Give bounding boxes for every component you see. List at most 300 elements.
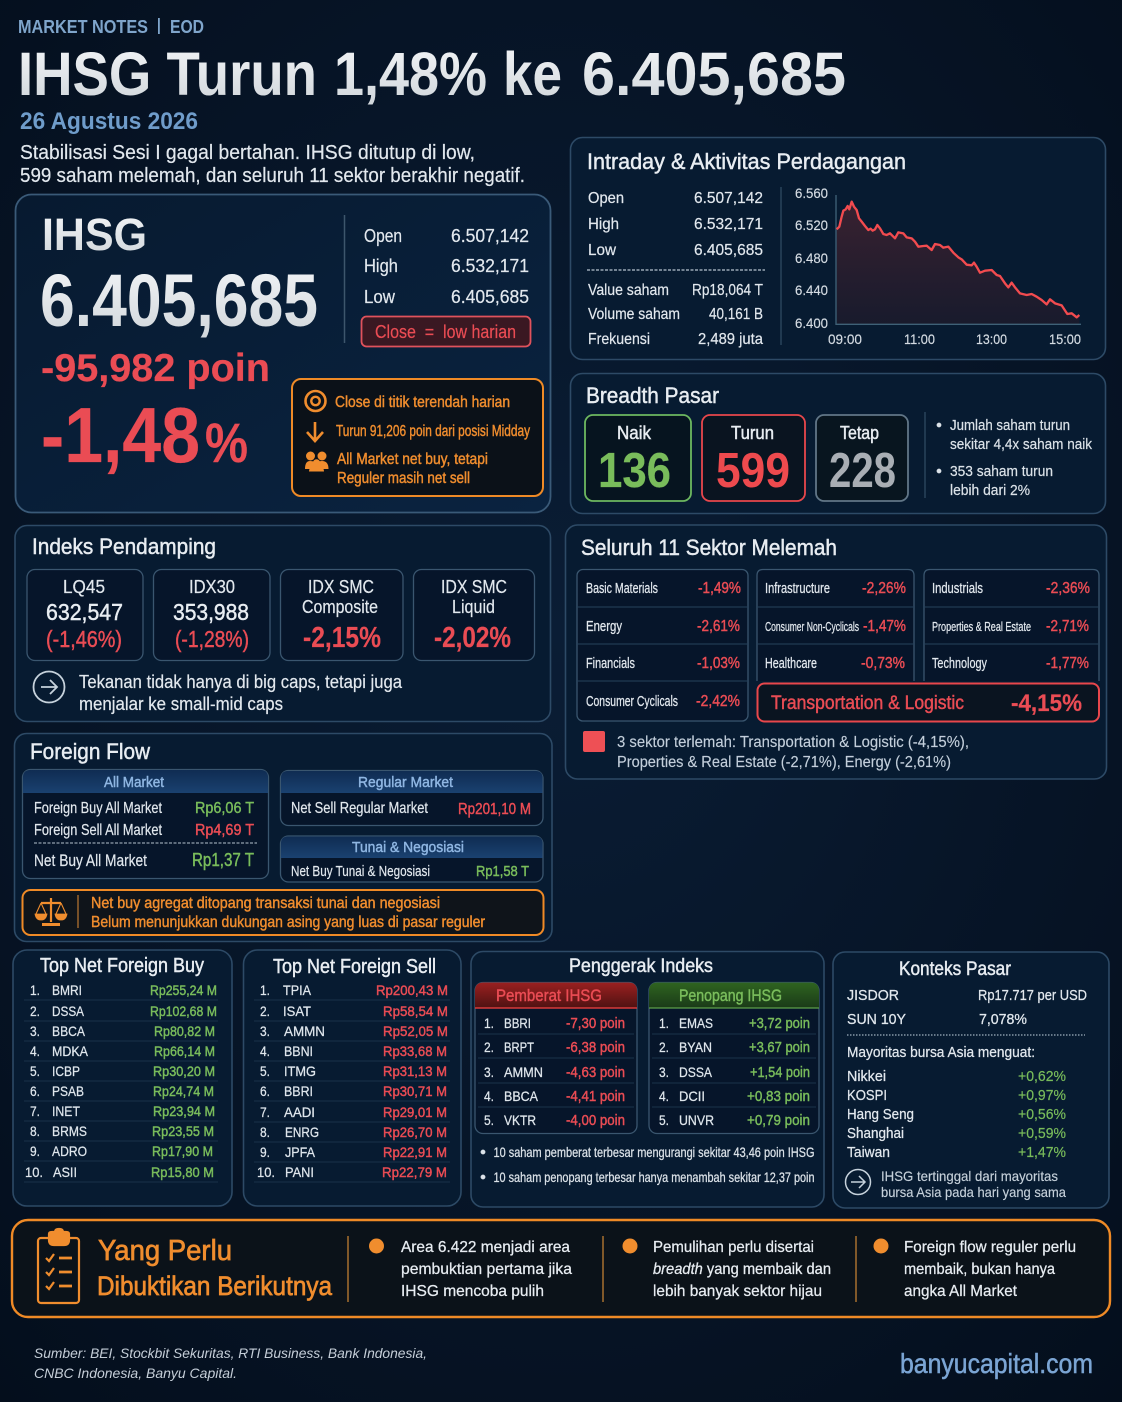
source note: CNBC Indonesia, Banyu Capital. — [34, 1365, 237, 1381]
list: buy rows: 3. — [30, 1023, 40, 1039]
stat: unchanged: 228 — [829, 444, 896, 498]
list: sell values: Rp33,68 M — [383, 1043, 447, 1059]
sector table column 3: Properties & Real Estate — [932, 619, 1031, 634]
subtitle: 599 saham melemah, dan seluruh 11 sektor berakhir negatif. — [20, 165, 525, 187]
item one — [369, 1238, 572, 1300]
table: laggards: -4,00 poin — [566, 1112, 625, 1129]
table: laggards: 2. — [484, 1039, 494, 1055]
list: buy values: Rp24,74 M — [153, 1083, 214, 1099]
callout: net buy note: Net buy agregat ditopang transaksi tunai dan negosiasi — [91, 895, 440, 912]
table: laggards: AMMN — [504, 1064, 543, 1080]
item three: membaik, bukan hanya — [904, 1261, 1055, 1278]
item two — [622, 1238, 831, 1300]
point change: -95,982 poin — [41, 347, 270, 390]
panel: market breadth — [570, 374, 1106, 514]
list: buy rows: 6. — [30, 1083, 40, 1099]
panel: companion indices — [15, 526, 550, 722]
activity list: Volume saham — [588, 306, 680, 323]
table: laggards: -6,38 poin — [566, 1039, 625, 1056]
panel: all eleven sectors down — [566, 525, 1106, 779]
sector table column 3: -2,36% — [1046, 580, 1090, 597]
table: laggards: BBCA — [504, 1088, 539, 1104]
item three: angka All Market — [904, 1283, 1018, 1300]
line chart: intraday: 6.400 — [795, 315, 828, 331]
table: supporters: 2. — [659, 1039, 669, 1055]
title: 6.405,685 — [582, 40, 846, 108]
sector table column 2: Healthcare — [765, 655, 817, 672]
table: laggards: 5. — [484, 1112, 494, 1128]
card: LQ45: LQ45 — [63, 577, 105, 597]
list: sell rows: TPIA — [283, 982, 312, 998]
table: supporters: DSSA — [679, 1064, 713, 1080]
list: sell rows: 9. — [260, 1144, 270, 1160]
list: sell rows: 5. — [260, 1063, 270, 1079]
list: buy rows: 4. — [30, 1043, 40, 1059]
list: buy rows: BBCA — [52, 1023, 86, 1039]
list: sell rows: BBNI — [284, 1043, 313, 1059]
Asia markets: +0,62% — [1018, 1068, 1066, 1085]
activity list: Value saham — [588, 282, 669, 299]
card: all market: Foreign Buy All Market — [34, 800, 162, 817]
OHLC list: Low — [588, 242, 616, 259]
card: all market: Rp6,06 T — [195, 800, 254, 817]
Asia markets: Hang Seng — [847, 1106, 914, 1123]
table: laggards: -7,30 poin — [566, 1015, 625, 1032]
list: sell values: Rp29,01 M — [383, 1104, 447, 1120]
item two: breadth yang membaik dan — [653, 1261, 831, 1278]
item two: Pemulihan perlu disertai — [653, 1239, 814, 1256]
callout: net buy note — [22, 890, 544, 935]
heading: Top Net Foreign Buy — [40, 955, 204, 977]
list: buy values: Rp17,90 M — [152, 1143, 213, 1159]
list: buy values: Rp23,55 M — [152, 1123, 214, 1139]
Asia markets: +0,59% — [1018, 1125, 1066, 1142]
list: buy rows: BRMS — [52, 1123, 87, 1139]
card: IDX30: (-1,28%) — [175, 626, 249, 652]
card: IDX SMC Liquid: IDX SMC — [441, 577, 507, 597]
breadth notes: lebih dari 2% — [950, 482, 1030, 499]
heading: Dibuktikan Berikutnya — [97, 1271, 333, 1301]
table: supporters: +3,67 poin — [749, 1039, 810, 1056]
table: supporters: 4. — [659, 1088, 669, 1104]
list: buy values: Rp102,68 M — [150, 1003, 217, 1019]
heading: Foreign Flow — [30, 739, 150, 764]
card: all market: Net Buy All Market — [34, 851, 147, 870]
callout: net buy note: Belum menunjukkan dukungan asing yang luas di pasar reguler — [91, 914, 486, 931]
line chart: intraday: 11:00 — [904, 331, 935, 347]
list: sell rows: 7. — [260, 1104, 270, 1120]
table: supporters: 1. — [659, 1015, 669, 1031]
list: sell rows: 8. — [260, 1124, 270, 1140]
list: sell values: Rp30,71 M — [383, 1083, 447, 1099]
callout: key notes — [292, 379, 543, 496]
source note — [34, 1345, 427, 1381]
card: IDX30: 353,988 — [173, 599, 249, 625]
card: all market: Rp1,37 T — [192, 850, 254, 870]
card: cash and negotiated — [280, 836, 543, 882]
card: IDX SMC Liquid: Liquid — [452, 597, 495, 617]
movers notes: 10 saham pemberat terbesar mengurangi sekitar 43,46 poin IHSG — [494, 1144, 814, 1160]
list: buy rows: MDKA — [52, 1043, 89, 1059]
close equals low badge: Close = low harian — [375, 322, 516, 342]
card: regular market: Rp201,10 M — [458, 801, 531, 818]
note — [881, 1168, 1066, 1200]
sector table column 2 — [757, 570, 914, 681]
card: all market: Rp4,69 T — [195, 822, 254, 839]
heading: Penggerak Indeks — [569, 956, 713, 977]
item one: pembuktian pertama jika — [401, 1261, 572, 1278]
list: buy rows: 5. — [30, 1063, 40, 1079]
table: supporters: 5. — [659, 1112, 669, 1128]
sector table column 3: -1,77% — [1046, 655, 1089, 672]
list: sell values: Rp31,13 M — [383, 1063, 447, 1079]
list: sell values: Rp58,54 M — [383, 1003, 448, 1019]
rates — [847, 987, 1087, 1028]
heading: Intraday & Aktivitas Perdagangan — [587, 149, 906, 174]
panel: IHSG hero — [16, 194, 550, 512]
list: sell rows: 2. — [260, 1003, 270, 1019]
stat: decliners — [702, 415, 805, 501]
breadth notes: sekitar 4,4x saham naik — [950, 436, 1092, 453]
panel: what needs proving next — [12, 1220, 1110, 1317]
activity list: 40,161 B — [709, 306, 763, 323]
header — [18, 17, 846, 187]
list: buy rows: 9. — [30, 1143, 40, 1159]
list: buy rows: 2. — [30, 1003, 40, 1019]
sector table column 1: Energy — [586, 618, 622, 635]
OHLC table: 6.507,142 — [451, 226, 529, 246]
list: buy rows: BMRI — [52, 982, 82, 998]
panel: index movers — [471, 952, 824, 1207]
panel: top net foreign sell — [244, 950, 461, 1206]
note: bursa Asia pada hari yang sama — [881, 1184, 1066, 1200]
list: buy values: Rp23,94 M — [153, 1103, 215, 1119]
card: all market: Foreign Sell All Market — [34, 822, 162, 839]
table: supporters: Penopang IHSG — [679, 986, 782, 1005]
stat: decliners: 599 — [716, 444, 790, 498]
card: LQ45: 632,547 — [46, 599, 123, 625]
website: banyucapital.com — [900, 1348, 1093, 1379]
sector table column 3: Technology — [932, 655, 987, 672]
card: cash and negotiated: Net Buy Tunai & Negosiasi — [291, 863, 430, 880]
panel: intraday and trading activity — [570, 138, 1106, 360]
sector table column 3: Industrials — [932, 580, 983, 597]
title: ke — [503, 40, 562, 108]
OHLC table: Open — [364, 226, 402, 246]
title — [18, 40, 846, 108]
heading — [97, 1235, 333, 1301]
Asia markets: +0,56% — [1018, 1106, 1066, 1123]
eyebrow: EOD — [170, 17, 204, 37]
list: sell rows: AMMN — [284, 1023, 325, 1039]
Asia markets: +1,47% — [1018, 1144, 1066, 1161]
card: cash and negotiated: Rp1,58 T — [476, 863, 529, 880]
callout: key notes: Reguler masih net sell — [337, 470, 470, 487]
highlighted sector: transportation: Transportation & Logistic — [771, 693, 964, 714]
line chart: intraday: 15:00 — [1049, 331, 1081, 347]
list: buy values: Rp80,82 M — [154, 1023, 215, 1039]
closing value: 6.405,685 — [40, 259, 318, 342]
heading: Top Net Foreign Sell — [273, 956, 436, 978]
date: 26 Agustus 2026 — [20, 108, 198, 135]
sector table column 2: -2,26% — [862, 580, 906, 597]
table: supporters: +1,54 poin — [750, 1064, 810, 1081]
OHLC table: Low — [364, 287, 396, 307]
weakest sector note: Properties & Real Estate (-2,71%), Energy (-2,61%) — [617, 754, 951, 771]
Asia markets — [847, 1044, 1066, 1161]
activity list: Frekuensi — [588, 331, 650, 348]
percent change: % — [205, 411, 248, 474]
table: supporters: DCII — [679, 1088, 705, 1104]
card: IDX SMC Composite — [280, 570, 403, 660]
panel: market context — [833, 952, 1109, 1208]
card: regular market: Net Sell Regular Market — [291, 800, 428, 817]
sector table column 2: Consumer Non-Cyclicals — [765, 619, 859, 634]
table: supporters: UNVR — [679, 1112, 714, 1128]
card: LQ45 — [27, 570, 143, 660]
card: IDX SMC Composite: -2,15% — [303, 622, 381, 654]
heading: Breadth Pasar — [586, 383, 719, 408]
table: laggards: -4,41 poin — [566, 1088, 625, 1105]
table: supporters: +3,72 poin — [749, 1015, 810, 1032]
list: sell rows: 1. — [260, 982, 270, 998]
card: regular market — [280, 770, 543, 826]
icon: people — [305, 452, 328, 472]
note — [79, 672, 403, 714]
eyebrow: MARKET NOTES — [18, 17, 148, 37]
table: laggards: BRPT — [504, 1039, 534, 1055]
list: sell rows: ENRG — [285, 1124, 319, 1140]
sector table column 1 — [577, 570, 748, 721]
Asia markets: Shanghai — [847, 1125, 904, 1142]
list: buy values: Rp66,14 M — [154, 1043, 215, 1059]
list: sell rows: 4. — [260, 1043, 270, 1059]
table: supporters: BYAN — [679, 1039, 712, 1055]
list: buy rows: PSAB — [52, 1083, 84, 1099]
list: buy rows: 1. — [30, 982, 40, 998]
list: sell values — [376, 982, 448, 1180]
table: laggards: 3. — [484, 1064, 494, 1080]
list: buy rows: ADRO — [52, 1143, 87, 1159]
list: sell rows: AADI — [284, 1104, 315, 1120]
source note: Sumber: BEI, Stockbit Sekuritas, RTI Business, Bank Indonesia, — [34, 1345, 427, 1361]
list: sell values: Rp200,43 M — [376, 982, 448, 998]
OHLC table: High — [364, 256, 398, 276]
highlighted sector: transportation: -4,15% — [1011, 690, 1082, 717]
icon: scales — [35, 898, 67, 924]
callout: key notes: Close di titik terendah harian — [335, 394, 510, 411]
list: buy values: Rp15,80 M — [151, 1164, 214, 1180]
sector table column 1: Consumer Cyclicals — [586, 693, 678, 710]
subtitle — [20, 142, 525, 187]
note: menjalar ke small-mid caps — [79, 694, 283, 714]
sector table column 1: Basic Materials — [586, 580, 658, 597]
table: supporters: +0,83 poin — [747, 1088, 810, 1105]
sector table column 3 — [924, 570, 1099, 681]
list: buy values: Rp255,24 M — [150, 982, 217, 998]
table: laggards: Pemberat IHSG — [496, 986, 602, 1005]
OHLC list: 6.405,685 — [694, 242, 763, 259]
sector table column 1: -1,49% — [698, 580, 741, 597]
weakest sector note: 3 sektor terlemah: Transportation & Logistic (-4,15%), — [617, 734, 969, 751]
card: IDX SMC Composite: Composite — [302, 597, 378, 617]
list: sell rows: 6. — [260, 1083, 270, 1099]
rates: Rp17.717 per USD — [978, 987, 1087, 1004]
line chart: intraday: 6.520 — [795, 217, 828, 233]
icon: circled arrow — [34, 672, 64, 702]
OHLC list: 6.532,171 — [694, 216, 763, 233]
sector table column 2: -1,47% — [863, 618, 906, 635]
card: all market — [22, 770, 268, 878]
OHLC list: High — [588, 216, 619, 233]
close equals low badge — [362, 316, 530, 346]
card: IDX30: IDX30 — [189, 577, 235, 597]
card: IDX SMC Composite: IDX SMC — [308, 577, 374, 597]
sector table column 2: Infrastructure — [765, 580, 830, 597]
title: IHSG Turun — [18, 40, 317, 108]
note: IHSG tertinggal dari mayoritas — [881, 1168, 1058, 1184]
item three — [874, 1238, 1076, 1300]
card: IDX30 — [154, 570, 270, 660]
list: buy rows: INET — [52, 1103, 80, 1119]
Asia markets: +0,97% — [1018, 1087, 1066, 1104]
table: supporters: +0,79 poin — [747, 1112, 810, 1129]
card: all market: All Market — [104, 774, 165, 791]
OHLC list: 6.507,142 — [694, 190, 763, 207]
movers notes: 10 saham penopang terbesar hanya menambah sekitar 12,37 poin — [494, 1169, 814, 1185]
table: laggards: BBRI — [504, 1015, 531, 1031]
sector table column 1: -2,61% — [697, 618, 740, 635]
table: laggards: 1. — [484, 1015, 494, 1031]
table: supporters: 3. — [659, 1064, 669, 1080]
list: buy rows: 7. — [30, 1103, 40, 1119]
list: sell rows: BBRI — [284, 1083, 313, 1099]
heading: Yang Perlu — [98, 1235, 232, 1267]
table: supporters — [649, 982, 819, 1134]
legend swatch — [583, 731, 605, 752]
card: LQ45: (-1,46%) — [46, 626, 122, 652]
rates: SUN 10Y — [847, 1011, 906, 1028]
sector table column 1: -2,42% — [696, 693, 740, 710]
list: sell rows: JPFA — [285, 1144, 316, 1160]
list: buy rows: 8. — [30, 1123, 40, 1139]
card: cash and negotiated: Tunai & Negosiasi — [352, 839, 464, 856]
line chart: intraday: 6.480 — [795, 250, 828, 266]
list: sell rows: ITMG — [284, 1063, 316, 1079]
card: regular market: Regular Market — [358, 774, 454, 791]
stat: advancers: 136 — [598, 444, 671, 498]
stat: unchanged: Tetap — [840, 423, 879, 443]
list: sell values: Rp22,91 M — [383, 1144, 447, 1160]
line chart: intraday: 6.440 — [795, 282, 828, 298]
breadth notes: Jumlah saham turun — [950, 417, 1070, 434]
list: buy rows: 10. — [25, 1164, 43, 1180]
weakest sector note — [617, 734, 969, 771]
callout: key notes: Turun 91,206 poin dari posisi Midday — [336, 423, 530, 440]
stat: advancers — [585, 415, 691, 501]
list: buy values: Rp30,20 M — [153, 1063, 215, 1079]
table: laggards: -4,63 poin — [566, 1064, 625, 1081]
percent change: -1,48 — [41, 391, 200, 479]
heading: Seluruh 11 Sektor Melemah — [581, 535, 837, 560]
icon: target — [306, 391, 326, 411]
title: 1,48% — [334, 40, 487, 108]
OHLC table: 6.405,685 — [451, 287, 529, 307]
icon: circled arrow — [846, 1170, 870, 1194]
list: sell rows: 10. — [257, 1164, 275, 1180]
list: sell rows — [257, 982, 325, 1180]
item three: Foreign flow reguler perlu — [904, 1239, 1076, 1256]
list: sell values: Rp26,70 M — [383, 1124, 447, 1140]
line chart: intraday: 09:00 — [828, 331, 862, 347]
table: supporters: EMAS — [679, 1015, 713, 1031]
sector table column 3: -2,71% — [1046, 618, 1089, 635]
list: sell rows: PANI — [285, 1164, 314, 1180]
Asia markets: Taiwan — [847, 1144, 890, 1161]
rates: 7,078% — [979, 1011, 1027, 1028]
activity list: Rp18,064 T — [692, 282, 763, 299]
list: sell values: Rp22,79 M — [382, 1164, 447, 1180]
OHLC list — [588, 190, 763, 259]
list: buy rows — [25, 982, 89, 1180]
table: laggards: 4. — [484, 1088, 494, 1104]
OHLC table: 6.532,171 — [451, 256, 529, 276]
card: IDX SMC Liquid: -2,02% — [434, 622, 511, 654]
breadth notes — [937, 417, 1092, 499]
heading: Indeks Pendamping — [32, 534, 216, 559]
highlighted sector: transportation — [758, 684, 1099, 722]
Asia markets: Nikkei — [847, 1068, 886, 1085]
table: laggards — [475, 982, 637, 1134]
activity list — [588, 282, 763, 348]
sector table column 1: Financials — [586, 655, 635, 672]
item one: IHSG mencoba pulih — [401, 1283, 544, 1300]
stat: advancers: Naik — [617, 423, 652, 443]
Asia markets: Mayoritas bursa Asia menguat: — [847, 1044, 1035, 1061]
stat: decliners: Turun — [731, 423, 774, 443]
icon: down arrow — [307, 422, 323, 441]
rates: JISDOR — [847, 987, 899, 1004]
card: IDX SMC Liquid — [414, 570, 534, 660]
OHLC list: Open — [588, 190, 624, 207]
callout: key notes: All Market net buy, tetapi — [337, 451, 488, 468]
heading: Konteks Pasar — [899, 959, 1012, 980]
sector table column 2: -0,73% — [861, 655, 905, 672]
list: sell rows: 3. — [260, 1023, 270, 1039]
table: laggards: VKTR — [504, 1112, 536, 1128]
index name: IHSG — [42, 209, 147, 260]
panel: foreign flow — [14, 734, 552, 942]
list: sell values: Rp52,05 M — [383, 1023, 448, 1039]
breadth notes: 353 saham turun — [950, 463, 1053, 480]
note: Tekanan tidak hanya di big caps, tetapi juga — [79, 672, 403, 692]
stat: unchanged — [816, 415, 908, 501]
icon: clipboard — [38, 1229, 79, 1303]
list: buy rows: ICBP — [52, 1063, 80, 1079]
panel: top net foreign buy — [13, 950, 232, 1206]
sector table column 1: -1,03% — [697, 655, 740, 672]
subtitle: Stabilisasi Sesi I gagal bertahan. IHSG ditutup di low, — [20, 142, 475, 164]
movers notes — [481, 1144, 814, 1185]
Asia markets: KOSPI — [847, 1087, 887, 1104]
activity list: 2,489 juta — [698, 331, 763, 348]
OHLC table — [364, 226, 529, 307]
line chart: intraday: 6.560 — [795, 185, 828, 201]
line chart: intraday — [795, 185, 1081, 347]
list: buy rows: DSSA — [52, 1003, 85, 1019]
line chart: intraday: 13:00 — [976, 331, 1007, 347]
list: sell rows: ISAT — [283, 1003, 311, 1019]
